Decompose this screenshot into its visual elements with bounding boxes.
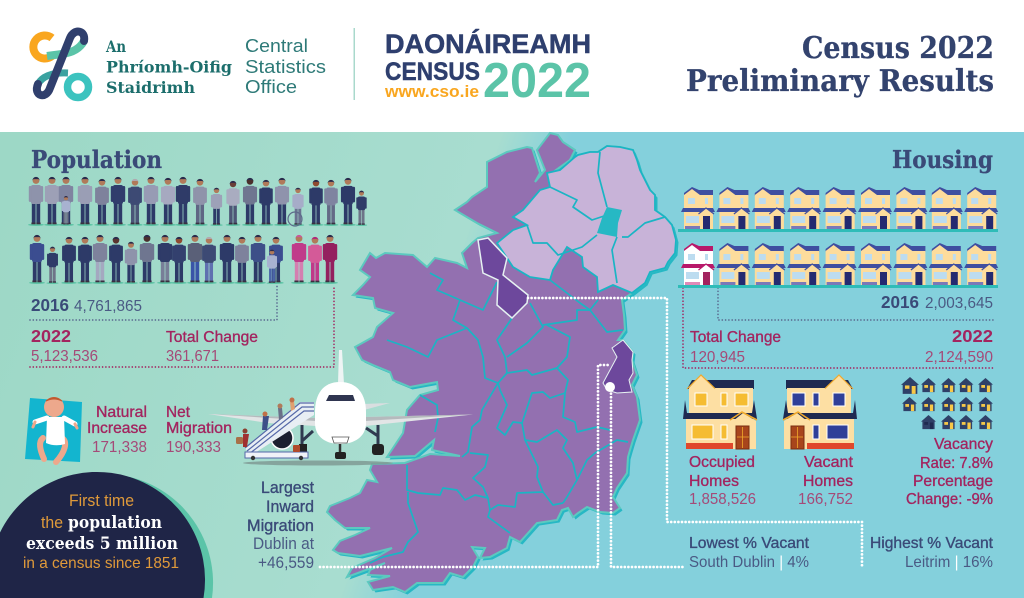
passengers bbox=[236, 398, 300, 452]
text: natural increase: Natural bbox=[96, 404, 147, 421]
text: largest inward migration: Migration bbox=[247, 517, 314, 535]
text: population 2022: 5,123,536 bbox=[31, 348, 98, 365]
text: population 2022: 2022 bbox=[31, 326, 71, 346]
logo text: Irish name: An bbox=[105, 37, 126, 56]
text: highest vacancy bbox=[870, 535, 994, 571]
text: largest inward migration: +46,559 bbox=[258, 554, 314, 572]
text: housing total change bbox=[690, 329, 781, 366]
heading: Housing: Housing bbox=[892, 145, 993, 174]
boarding stairs bbox=[245, 402, 314, 460]
logo text: Irish name bbox=[105, 37, 232, 97]
text: occupied homes: Homes bbox=[689, 473, 739, 490]
people row 2 bbox=[29, 235, 338, 284]
text: largest inward migration: Largest bbox=[261, 479, 314, 497]
text: population 2022 bbox=[31, 326, 98, 365]
text: vacancy rate: Change: -9% bbox=[906, 491, 993, 508]
text: occupied homes: Occupied bbox=[689, 454, 755, 471]
title: Preliminary Results bbox=[686, 64, 994, 99]
text: lowest vacancy: South Dublin | 4% bbox=[689, 554, 809, 571]
text: largest inward migration: Inward bbox=[266, 498, 314, 516]
text: net migration: Net bbox=[166, 404, 191, 421]
text: population total change: 361,671 bbox=[166, 348, 219, 365]
airplane with boarding stairs bbox=[208, 350, 473, 466]
people row 1 bbox=[28, 177, 367, 226]
text: highest vacancy: Leitrim | 16% bbox=[905, 554, 993, 571]
header: census logo: CENSUS bbox=[385, 58, 480, 86]
text: housing 2016: 2016 bbox=[881, 292, 919, 312]
text: vacant homes bbox=[798, 454, 854, 508]
map: Northern Ireland bbox=[497, 146, 676, 293]
text: population 2016: 4,761,865 bbox=[74, 298, 142, 315]
text: vacant homes: Homes bbox=[803, 473, 853, 490]
callout: first time over 5 million: First time bbox=[69, 491, 134, 510]
map of Ireland bbox=[327, 133, 678, 594]
text: vacancy rate: Percentage bbox=[913, 473, 993, 490]
text: largest inward migration bbox=[247, 479, 314, 572]
callout: first time over 5 million: population bbox=[68, 513, 162, 532]
callout: first time over 5 million: the bbox=[41, 513, 63, 532]
icon: vacant home bbox=[783, 375, 857, 449]
map: Dublin highlight bbox=[603, 340, 633, 393]
callout: first time over 5 million: in a census since 1851 bbox=[23, 555, 179, 572]
text: highest vacancy: Highest % Vacant bbox=[870, 535, 994, 552]
title bbox=[686, 31, 994, 99]
text: population total change bbox=[166, 329, 258, 365]
header: census logo bbox=[384, 28, 591, 108]
callout: first time over 5 million: exceeds 5 million bbox=[26, 534, 178, 553]
text: vacancy rate: Rate: 7.8% bbox=[920, 455, 993, 472]
logo text: English name: Statistics bbox=[245, 56, 326, 77]
text: natural increase: 171,338 bbox=[92, 439, 147, 456]
header: CSO logo bbox=[33, 32, 326, 97]
text: occupied homes bbox=[689, 454, 756, 508]
text: net migration: Migration bbox=[166, 420, 232, 437]
houses row 1 bbox=[678, 187, 998, 232]
text: vacant homes: 166,752 bbox=[798, 491, 853, 508]
dotted connector lines bbox=[30, 286, 993, 567]
icon: vacancy rate small houses bbox=[901, 377, 993, 429]
icon: occupied home bbox=[683, 375, 757, 449]
text: largest inward migration: Dublin at bbox=[253, 535, 314, 553]
logo text: Irish name: Staidrimh bbox=[106, 78, 195, 97]
header: census logo: DAONÁIREAMH bbox=[385, 28, 591, 59]
text: net migration: 190,333 bbox=[166, 439, 221, 456]
logo text: Irish name: Phríomh-Oifig bbox=[106, 58, 232, 76]
callout: first time over 5 million bbox=[0, 472, 213, 598]
text: occupied homes: 1,858,526 bbox=[689, 491, 756, 508]
text: population total change: Total Change bbox=[166, 329, 258, 346]
map: Lough Neagh bbox=[597, 207, 622, 237]
map: county boundaries bbox=[370, 152, 665, 563]
text: population 2016 bbox=[31, 295, 142, 315]
text: housing 2022: 2,124,590 bbox=[925, 349, 993, 366]
heading: Population: Population bbox=[31, 145, 162, 174]
icon: baby bbox=[25, 397, 82, 462]
header: census logo: www.cso.ie bbox=[384, 82, 479, 101]
text: vacancy rate: Vacancy bbox=[934, 436, 993, 453]
icon: CSO knot mark bbox=[33, 32, 88, 97]
text: housing 2022 bbox=[925, 326, 993, 366]
map: Leitrim highlight bbox=[478, 238, 528, 318]
houses row 2 bbox=[678, 243, 998, 288]
text: natural increase: Increase bbox=[87, 420, 147, 437]
logo text: English name bbox=[245, 35, 326, 97]
text: population 2016: 2016 bbox=[31, 295, 69, 315]
text: vacancy rate bbox=[906, 436, 993, 508]
text: lowest vacancy bbox=[689, 535, 810, 571]
text: net migration bbox=[166, 404, 232, 456]
header: census logo: 2022 bbox=[483, 54, 591, 108]
logo text: English name: Office bbox=[245, 76, 297, 97]
text: housing 2022: 2022 bbox=[952, 326, 993, 346]
text: housing total change: 120,945 bbox=[690, 349, 745, 366]
text: housing total change: Total Change bbox=[690, 329, 781, 346]
text: lowest vacancy: Lowest % Vacant bbox=[689, 535, 810, 552]
text: vacant homes: Vacant bbox=[804, 454, 854, 471]
marker: South Dublin bbox=[605, 382, 615, 392]
text: housing 2016 bbox=[881, 292, 993, 312]
logo text: English name: Central bbox=[245, 35, 308, 56]
title: Census 2022 bbox=[802, 31, 994, 66]
text: natural increase bbox=[87, 404, 147, 456]
text: housing 2016: 2,003,645 bbox=[925, 295, 993, 312]
